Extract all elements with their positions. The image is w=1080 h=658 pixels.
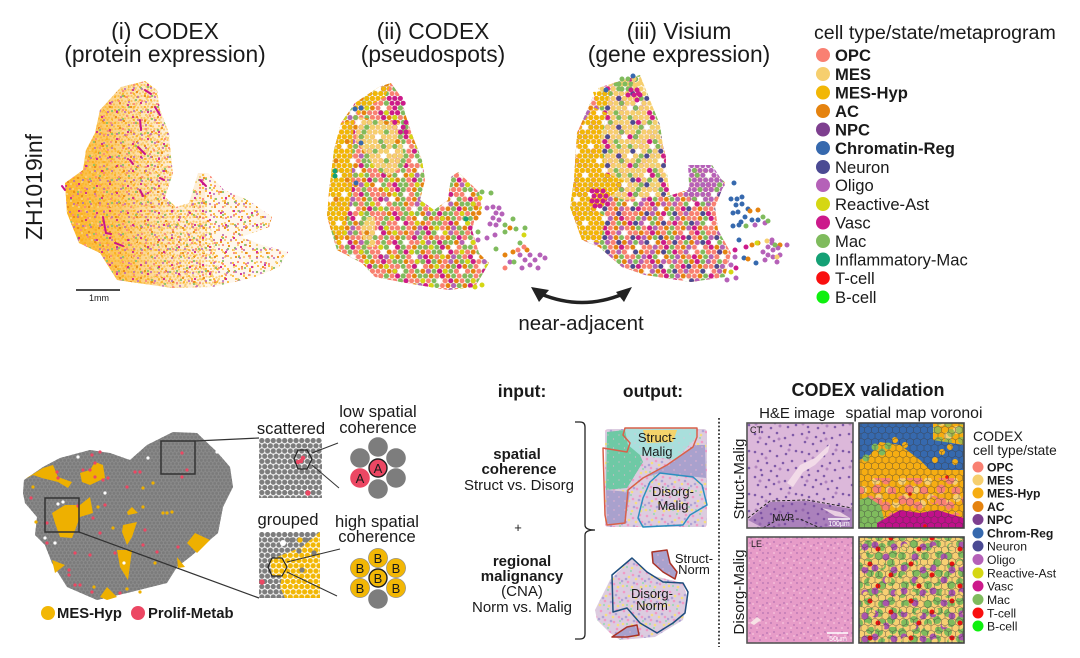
zoom box: scattered area	[161, 441, 195, 474]
heading: (iii) Visium gene expression: (gene expression)	[588, 41, 770, 67]
region labels	[631, 551, 713, 613]
detached spot clusters	[478, 207, 545, 268]
Struct-Malig outline	[603, 428, 697, 525]
legend: CODEX cell type/state: Mac	[987, 593, 1010, 607]
vasc band	[877, 510, 964, 528]
region labels: Struct-	[675, 551, 713, 566]
text: regional malignancy input: malignancy	[481, 568, 564, 585]
label: scattered: scattered	[257, 419, 325, 438]
diagram: high coherence neighbourhood: B	[392, 581, 400, 596]
heading: (i) CODEX protein expression: (protein expression)	[64, 41, 266, 67]
legend: CODEX cell type/state: AC	[987, 500, 1005, 514]
legend: MES-Hyp and Prolif-Metab: MES-Hyp	[57, 606, 122, 622]
label: high spatial coherence: high spatial	[335, 512, 419, 531]
panel: scattered zoom	[259, 438, 322, 498]
zoom box: grouped area	[45, 498, 79, 532]
region labels: Disorg-	[652, 484, 694, 499]
scale bar: 1mm	[76, 290, 120, 303]
region labels: Disorg-	[631, 586, 673, 601]
column header: spatial map voronoi: spatial map voronoi	[846, 405, 982, 422]
heading: (ii) CODEX pseudospots: (pseudospots)	[361, 41, 505, 67]
heading: (i) CODEX protein expression	[64, 18, 266, 67]
legend: cell type/state/metaprogram: Vasc	[835, 214, 871, 232]
legend: CODEX cell type/state: NPC	[987, 513, 1013, 527]
legend: cell type/state/metaprogram: Inflammatory-Mac	[835, 250, 968, 270]
region labels: Malig	[657, 498, 689, 513]
label: low spatial coherence: low spatial	[339, 402, 417, 421]
legend: CODEX cell type/state: MES-Hyp	[987, 486, 1040, 500]
label: high spatial coherence: coherence	[338, 527, 416, 546]
legend: CODEX cell type/state: MES	[987, 474, 1013, 488]
mac left bottom	[859, 497, 885, 528]
brace	[575, 422, 595, 639]
blue region	[859, 423, 964, 470]
label: low spatial coherence	[339, 402, 417, 437]
heading: (iii) Visium gene expression: (iii) Visium	[627, 18, 731, 44]
legend: cell type/state/metaprogram: NPC	[835, 120, 870, 140]
map: voronoi Struct-Malig	[859, 423, 964, 528]
panel: CODEX pseudospots map	[320, 80, 545, 295]
legend: cell type/state/metaprogram: Mac	[835, 232, 866, 251]
legend: cell type/state/metaprogram: Chromatin-Reg	[835, 139, 955, 158]
heading: input: input:	[498, 381, 546, 401]
heading: output: output:	[623, 381, 683, 401]
label: low spatial coherence: coherence	[339, 418, 417, 437]
label: grouped: grouped	[258, 510, 318, 529]
legend: cell type/state/metaprogram	[814, 22, 1056, 307]
diagram: high coherence neighbourhood: B	[392, 561, 400, 576]
plus sign: +	[514, 520, 522, 535]
region labels: Norm	[678, 562, 710, 577]
row label: Struct-Malig: Struct-Malig	[731, 438, 748, 520]
image: H&amp;E CT: CT	[750, 425, 762, 435]
diagram: high coherence neighbourhood: B	[356, 581, 364, 596]
legend: CODEX cell type/state: Chrom-Reg	[987, 526, 1053, 540]
legend: CODEX cell type/state: Vasc	[987, 580, 1013, 594]
image: H&amp;E LE: LE	[751, 539, 762, 549]
image: H&amp;E LE: 50µm	[829, 636, 847, 643]
region labels: Malig	[641, 444, 673, 459]
MES-Hyp patches	[25, 462, 210, 600]
diagram: high coherence neighbourhood: B	[374, 551, 382, 566]
column header: H&amp;E image: H&E image	[759, 405, 835, 422]
scale bar: 1mm: 1mm	[89, 293, 109, 303]
diagram: high coherence neighbourhood: B	[374, 571, 382, 586]
panel: output Struct-Malig and Disorg-Malig regions	[603, 428, 707, 527]
legend: MES-Hyp and Prolif-Metab	[41, 606, 234, 622]
legend: cell type/state/metaprogram: Neuron	[835, 158, 889, 177]
legend: CODEX cell type/state	[972, 428, 1057, 634]
image: H&amp;E CT	[747, 423, 853, 528]
heading: (ii) CODEX pseudospots	[361, 18, 505, 67]
legend: cell type/state/metaprogram: OPC	[835, 46, 871, 65]
region labels: Struct-	[638, 430, 676, 445]
region labels	[638, 430, 694, 513]
image: H&amp;E LE	[747, 537, 853, 643]
legend: CODEX cell type/state: CODEX	[973, 428, 1023, 444]
heading: (ii) CODEX pseudospots: (ii) CODEX	[377, 18, 489, 44]
diagram: low coherence neighbourhood	[350, 437, 406, 499]
y-axis label: sample name: ZH1019inf	[21, 133, 47, 240]
legend: cell type/state/metaprogram: AC	[835, 102, 859, 121]
text: spatial coherence input: Struct vs. Disorg	[464, 477, 574, 494]
text: regional malignancy input: Norm vs. Malig	[472, 599, 572, 616]
Prolif-Metab spots	[31, 452, 187, 593]
panel: protein expression cell map	[60, 81, 288, 288]
panel: grouped zoom	[259, 530, 322, 598]
legend: cell type/state/metaprogram: B-cell	[835, 288, 876, 307]
panel: Visium spots map	[565, 75, 787, 285]
legend: CODEX cell type/state: B-cell	[987, 620, 1017, 634]
magenta vessels	[62, 90, 206, 246]
diagram: high coherence neighbourhood	[350, 548, 406, 609]
Disorg-Malig outline	[638, 473, 707, 527]
connector lines from hexagons	[287, 443, 340, 596]
legend: CODEX cell type/state: OPC	[987, 460, 1014, 474]
label: high spatial coherence	[335, 512, 419, 546]
top-right mix	[933, 423, 964, 445]
legend: cell type/state/metaprogram: Oligo	[835, 176, 874, 195]
legend: CODEX cell type/state: cell type/state	[973, 443, 1057, 458]
label: near-adjacent: near-adjacent	[518, 312, 644, 335]
vasc spots upper right	[389, 98, 406, 132]
diagram: low coherence neighbourhood: A	[356, 471, 365, 486]
legend: CODEX cell type/state: T-cell	[987, 606, 1016, 620]
legend: CODEX cell type/state: Neuron	[987, 540, 1027, 554]
legend: cell type/state/metaprogram: cell type/state/metaprogram	[814, 22, 1056, 44]
text: regional malignancy input: regional	[493, 553, 551, 570]
legend: CODEX cell type/state: Oligo	[987, 553, 1016, 567]
image: H&amp;E CT: MVP	[772, 513, 794, 524]
diagram: high coherence neighbourhood: B	[356, 561, 364, 576]
text: spatial coherence input: coherence	[481, 461, 557, 478]
text: spatial coherence input: spatial	[493, 446, 541, 463]
row label: Disorg-Malig: Disorg-Malig	[731, 549, 748, 635]
panel: hex spatial map with MES-Hyp and Prolif-Metab	[23, 432, 233, 600]
region labels: Norm	[636, 598, 668, 613]
heading: (i) CODEX protein expression: (i) CODEX	[111, 18, 219, 44]
Disorg-Norm outline	[612, 558, 688, 633]
legend: cell type/state/metaprogram: MES	[835, 65, 871, 84]
heading: CODEX validation: CODEX validation	[791, 380, 945, 400]
image: H&amp;E CT: 100µm	[828, 521, 850, 528]
legend: cell type/state/metaprogram: Reactive-Ast	[835, 195, 929, 214]
legend: CODEX cell type/state: Reactive-Ast	[987, 566, 1057, 580]
top mac and vasc spots	[619, 79, 631, 89]
heading: (iii) Visium gene expression	[588, 18, 770, 67]
text: regional malignancy input: (CNA)	[501, 583, 543, 600]
vasc patch in MES-Hyp	[592, 191, 606, 206]
connector lines from map to zooms	[79, 438, 259, 598]
legend: cell type/state/metaprogram: MES-Hyp	[835, 84, 908, 102]
panel: output Disorg-Norm and Struct-Norm regions	[595, 550, 713, 640]
hexagon outline	[294, 450, 312, 469]
dotted separator	[718, 418, 720, 647]
map: voronoi Disorg-Malig	[859, 537, 964, 643]
arrow: near-adjacent double arrow	[531, 287, 632, 302]
text: spatial coherence input	[464, 446, 574, 494]
Struct-Norm outline	[652, 550, 677, 579]
detached spot clusters	[731, 183, 758, 263]
diagram: low coherence neighbourhood: A	[374, 461, 383, 476]
hexagon outline	[268, 558, 287, 576]
legend: cell type/state/metaprogram: T-cell	[835, 269, 875, 288]
text: regional malignancy input	[472, 553, 572, 616]
legend: MES-Hyp and Prolif-Metab: Prolif-Metab	[148, 606, 234, 622]
